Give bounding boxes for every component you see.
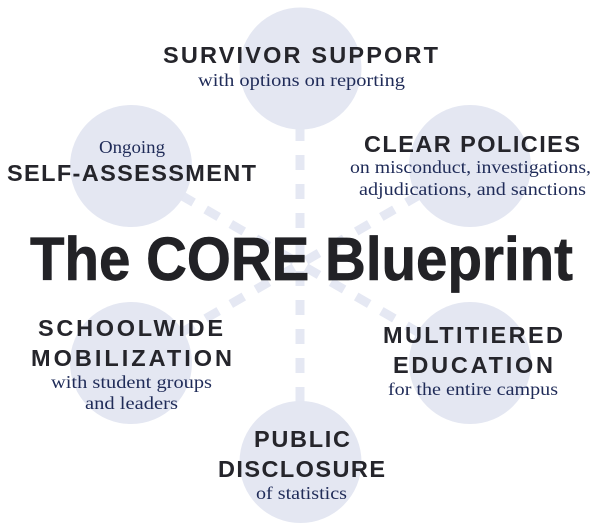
node: public disclosure: DISCLOSURE <box>218 456 385 482</box>
title: The CORE Blueprint <box>30 225 573 293</box>
node: public disclosure: PUBLIC <box>254 426 350 452</box>
node: self-assessment <box>7 137 257 186</box>
node: schoolwide mobilization: SCHOOLWIDE <box>38 315 223 341</box>
node: public disclosure <box>218 426 385 503</box>
node: survivor support: SURVIVOR SUPPORT <box>163 42 439 68</box>
node: multitiered education: for the entire campus <box>388 379 558 399</box>
node: schoolwide mobilization: with student groups <box>51 372 212 392</box>
node: self-assessment: SELF-ASSESSMENT <box>7 160 257 186</box>
node: multitiered education: MULTITIERED <box>383 322 563 348</box>
node: multitiered education: EDUCATION <box>393 352 553 378</box>
node: self-assessment: Ongoing <box>99 137 165 157</box>
node: schoolwide mobilization: MOBILIZATION <box>31 345 232 371</box>
node: public disclosure: of statistics <box>256 483 347 503</box>
node: survivor support: with options on reporting <box>198 70 405 90</box>
node: multitiered education <box>383 322 563 399</box>
node: schoolwide mobilization <box>31 315 232 413</box>
node: clear policies: on misconduct, investigations, <box>350 157 591 177</box>
node: clear policies: adjudications, and sanctions <box>359 179 586 199</box>
node: clear policies: CLEAR POLICIES <box>364 131 580 157</box>
node: schoolwide mobilization: and leaders <box>85 393 178 413</box>
node: clear policies <box>350 131 591 199</box>
node: survivor support <box>163 42 439 90</box>
hub connectors: dashed spokes <box>172 125 428 403</box>
node circles <box>70 8 531 523</box>
